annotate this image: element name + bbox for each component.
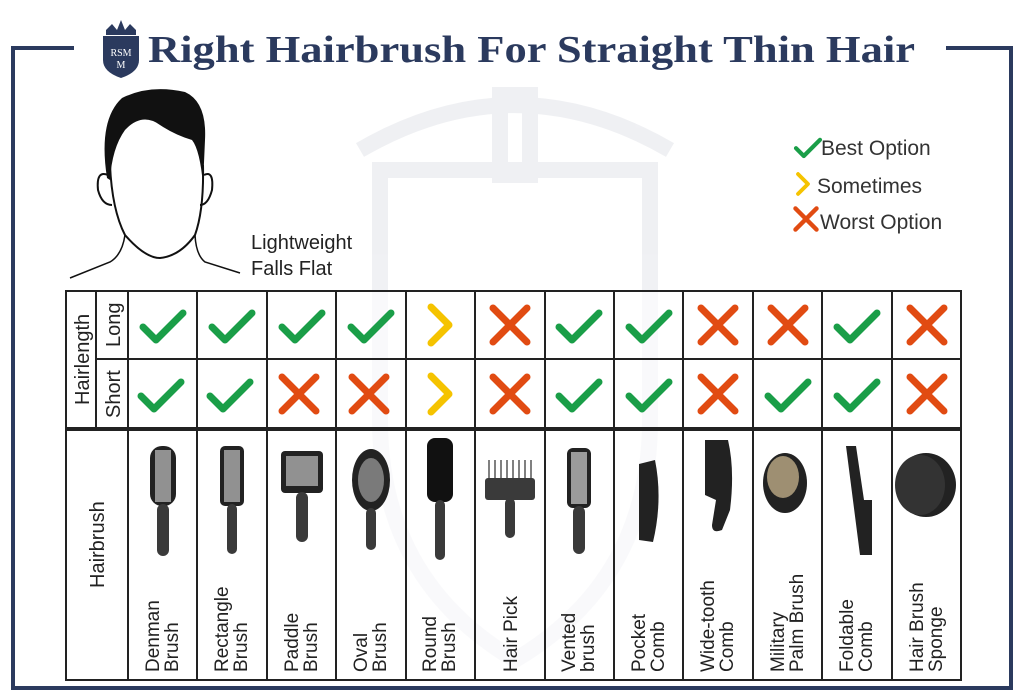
row: short — [141, 376, 944, 412]
row headers: Short — [103, 370, 125, 418]
icon: logo shield: RSM — [110, 48, 132, 59]
table — [66, 291, 961, 680]
brush labels: Comb — [648, 621, 669, 672]
brush labels: Military — [768, 611, 789, 672]
legend: Best Option — [821, 137, 931, 160]
brush labels: Foldable — [837, 599, 858, 672]
brush labels: Brush — [301, 622, 322, 672]
brush labels: Comb — [856, 621, 877, 672]
brush labels: Rectangle — [212, 586, 233, 672]
brush labels: Vented — [559, 613, 580, 672]
brush labels: Denman — [143, 600, 164, 672]
brush labels: Brush — [231, 622, 252, 672]
row headers: Hairbrush — [87, 501, 109, 588]
brush labels: Brush — [439, 622, 460, 672]
caption: hair type: Falls Flat — [251, 258, 333, 280]
table grid — [66, 291, 961, 680]
brush labels: Comb — [717, 621, 738, 672]
brush labels: brush — [578, 624, 599, 672]
legend: Sometimes — [817, 175, 922, 198]
brush labels: Pocket — [629, 613, 650, 672]
caption: hair type: Lightweight — [251, 232, 353, 254]
icon: logo shield: M — [117, 60, 126, 71]
brush labels: Sponge — [926, 606, 947, 672]
row headers: Long — [103, 302, 125, 347]
brush labels: Oval — [351, 633, 372, 672]
title — [103, 20, 915, 78]
brush labels — [143, 574, 947, 672]
watermark shield — [360, 95, 670, 660]
icon: logo shield — [103, 20, 139, 78]
row: long — [143, 307, 944, 343]
brush labels: Brush — [162, 622, 183, 672]
brush labels: Hair Pick — [501, 595, 522, 672]
icons: brushes — [150, 438, 956, 560]
brush labels: Brush — [370, 622, 391, 672]
illustration: head — [70, 89, 240, 278]
title: Right Hairbrush For Straight Thin Hair — [148, 29, 915, 71]
brush labels: Hair Brush — [907, 582, 928, 672]
brush labels: Wide-tooth — [698, 580, 719, 672]
legend — [795, 137, 942, 234]
brush labels: Palm Brush — [787, 574, 808, 672]
row headers: Hairlength — [72, 314, 94, 405]
brush labels: Paddle — [282, 613, 303, 672]
legend: Worst Option — [820, 211, 942, 234]
brush labels: Round — [420, 616, 441, 672]
row headers — [72, 302, 125, 588]
